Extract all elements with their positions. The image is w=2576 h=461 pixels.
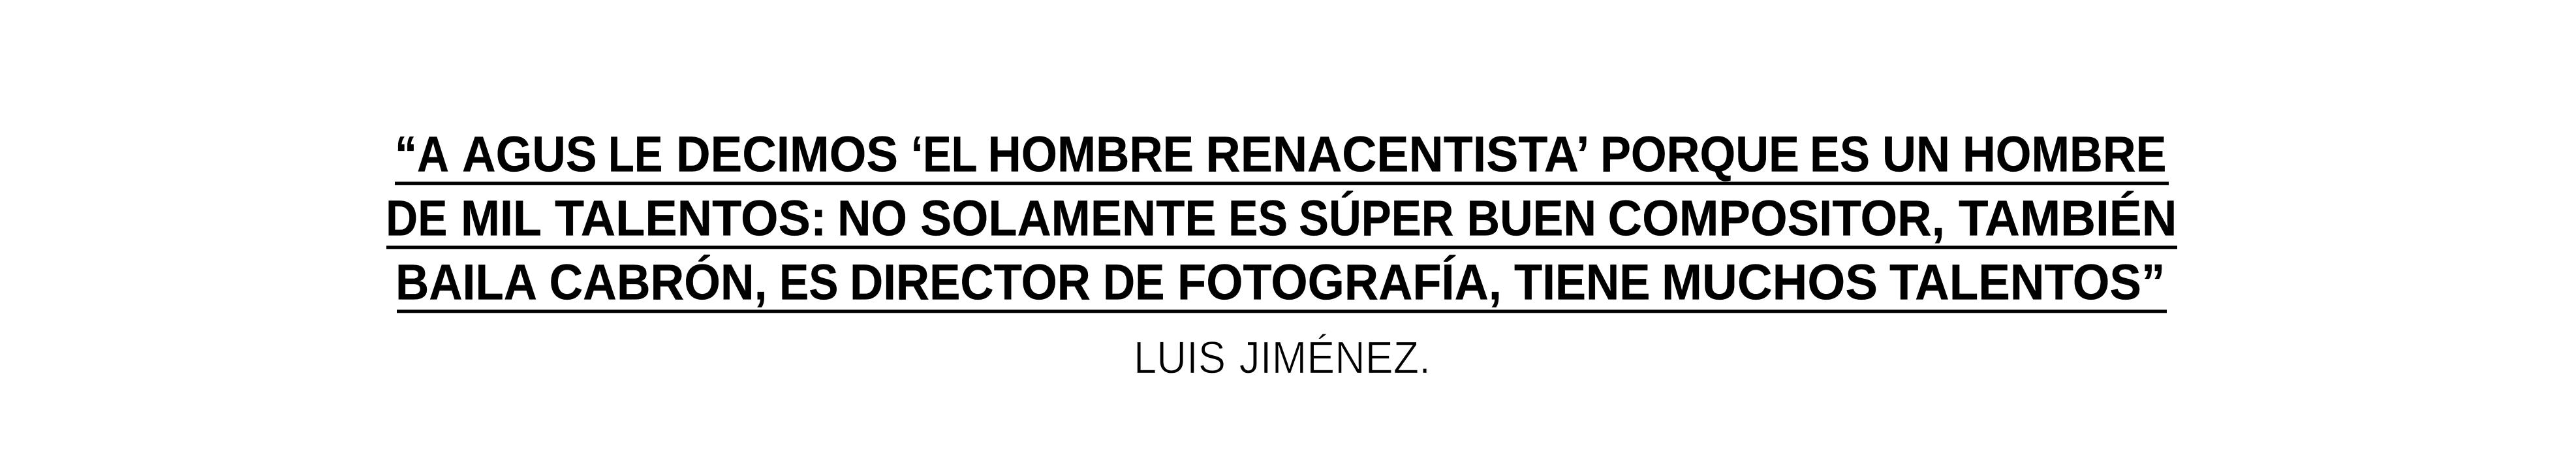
quote line 2: NO [837, 191, 907, 247]
quote line 2: TALENTOS: [555, 191, 826, 247]
quote line 2 [386, 191, 2177, 249]
quote line 1: UN [1882, 127, 1950, 183]
quote line 3: DE [1103, 255, 1164, 311]
quote line 3: BAILA [396, 255, 537, 311]
quote line 3 [396, 255, 2167, 313]
quote line 3: TIENE [1514, 255, 1650, 311]
quote line 3: DIRECTOR [850, 255, 1091, 311]
quote line 1: HOMBRE [988, 127, 1194, 183]
attribution: LUIS [1134, 332, 1226, 383]
quote line 1: DECIMOS [676, 127, 898, 183]
quote line 3: CABRÓN, [550, 255, 768, 311]
quote line 1: ‘EL [911, 127, 978, 183]
quote line 3: FOTOGRAFÍA, [1177, 255, 1502, 311]
quote line 1 [395, 127, 2169, 185]
quote line 2: DE [386, 191, 448, 247]
quote line 1: HOMBRE [1963, 127, 2167, 183]
quote block [386, 127, 2177, 313]
quote line 3: MUCHOS [1662, 255, 1878, 311]
attribution: JIMÉNEZ. [1239, 332, 1431, 383]
quote line 1: AGUS [462, 127, 597, 183]
attribution [1134, 332, 1431, 383]
quote line 1: LE [608, 127, 663, 183]
quote line 1: PORQUE [1600, 127, 1799, 183]
quote line 2: SOLAMENTE [920, 191, 1217, 247]
quote line 1: ES [1810, 127, 1870, 183]
quote line 2: COMPOSITOR, [1608, 191, 1945, 247]
quote line 2: SÚPER [1299, 191, 1454, 247]
quote line 3: TALENTOS” [1889, 255, 2165, 311]
quote line 2: BUEN [1467, 191, 1596, 247]
quote line 2: ES [1228, 191, 1288, 247]
quote line 1: RENACENTISTA’ [1206, 127, 1590, 183]
quote line 1: “A [395, 127, 449, 183]
quote line 2: MIL [461, 191, 542, 247]
quote line 2: TAMBIÉN [1959, 191, 2177, 247]
quote line 3: ES [779, 255, 838, 311]
